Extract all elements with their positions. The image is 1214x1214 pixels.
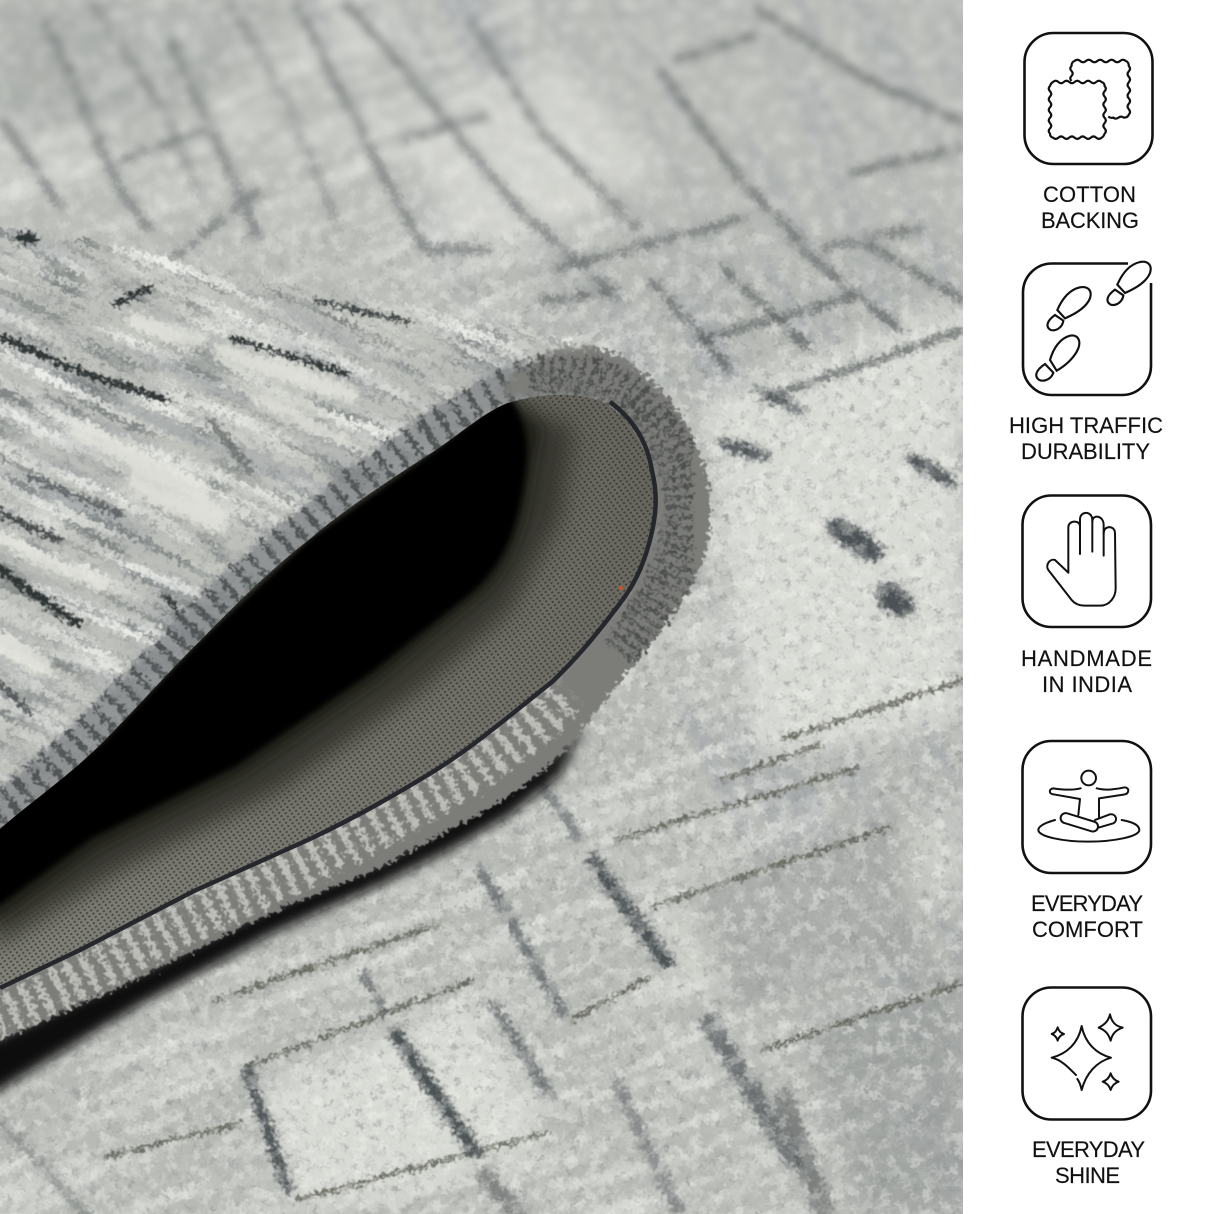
flap ribbed edge: [0, 380, 530, 826]
feature: everyday shine: [1022, 988, 1151, 1188]
label: everyday shine: [1032, 1137, 1145, 1188]
label: cotton backing: COTTON: [1043, 182, 1136, 207]
orange fleck: [619, 586, 623, 590]
icon: fabric swatches: [1024, 33, 1152, 164]
label: high traffic durability: DURABILITY: [1021, 439, 1150, 464]
icon: footprints: [1023, 262, 1151, 395]
fringe rim: [0, 345, 725, 1084]
icon: seated figure: [1022, 741, 1151, 873]
label: everyday comfort: COMFORT: [1032, 917, 1143, 942]
label: cotton backing: BACKING: [1041, 208, 1139, 233]
flap highlights: [0, 322, 350, 665]
dark cavity: [0, 395, 575, 950]
flap dark lines: [0, 236, 411, 712]
stitched edge: [0, 402, 656, 988]
label: everyday shine: SHINE: [1055, 1163, 1120, 1188]
label: cotton backing: [1041, 182, 1139, 233]
white sidebar: [963, 0, 1214, 1214]
label: handmade in india: [1021, 646, 1152, 697]
label: high traffic durability: HIGH TRAFFIC: [1009, 413, 1163, 438]
label: handmade in india: IN INDIA: [1042, 672, 1132, 697]
out-of-focus far rug: [0, 0, 963, 302]
backing lining: [0, 394, 654, 986]
feature: high traffic durability: [1009, 262, 1163, 464]
label: everyday comfort: [1031, 891, 1143, 942]
woolly roll body: [0, 226, 714, 1042]
label: high traffic durability: [1009, 413, 1163, 464]
label: everyday shine: EVERYDAY: [1032, 1137, 1145, 1162]
feature: everyday comfort: [1022, 741, 1151, 942]
icon: hand: [1022, 496, 1151, 627]
label: everyday comfort: EVERYDAY: [1031, 891, 1143, 916]
feature: handmade in india: [1021, 496, 1152, 697]
icon: sparkles: [1022, 988, 1151, 1120]
shadow under roll: [0, 725, 585, 1102]
rolled rug: [0, 226, 714, 1042]
feature: cotton backing: [1024, 33, 1152, 233]
label: handmade in india: HANDMADE: [1021, 646, 1152, 671]
